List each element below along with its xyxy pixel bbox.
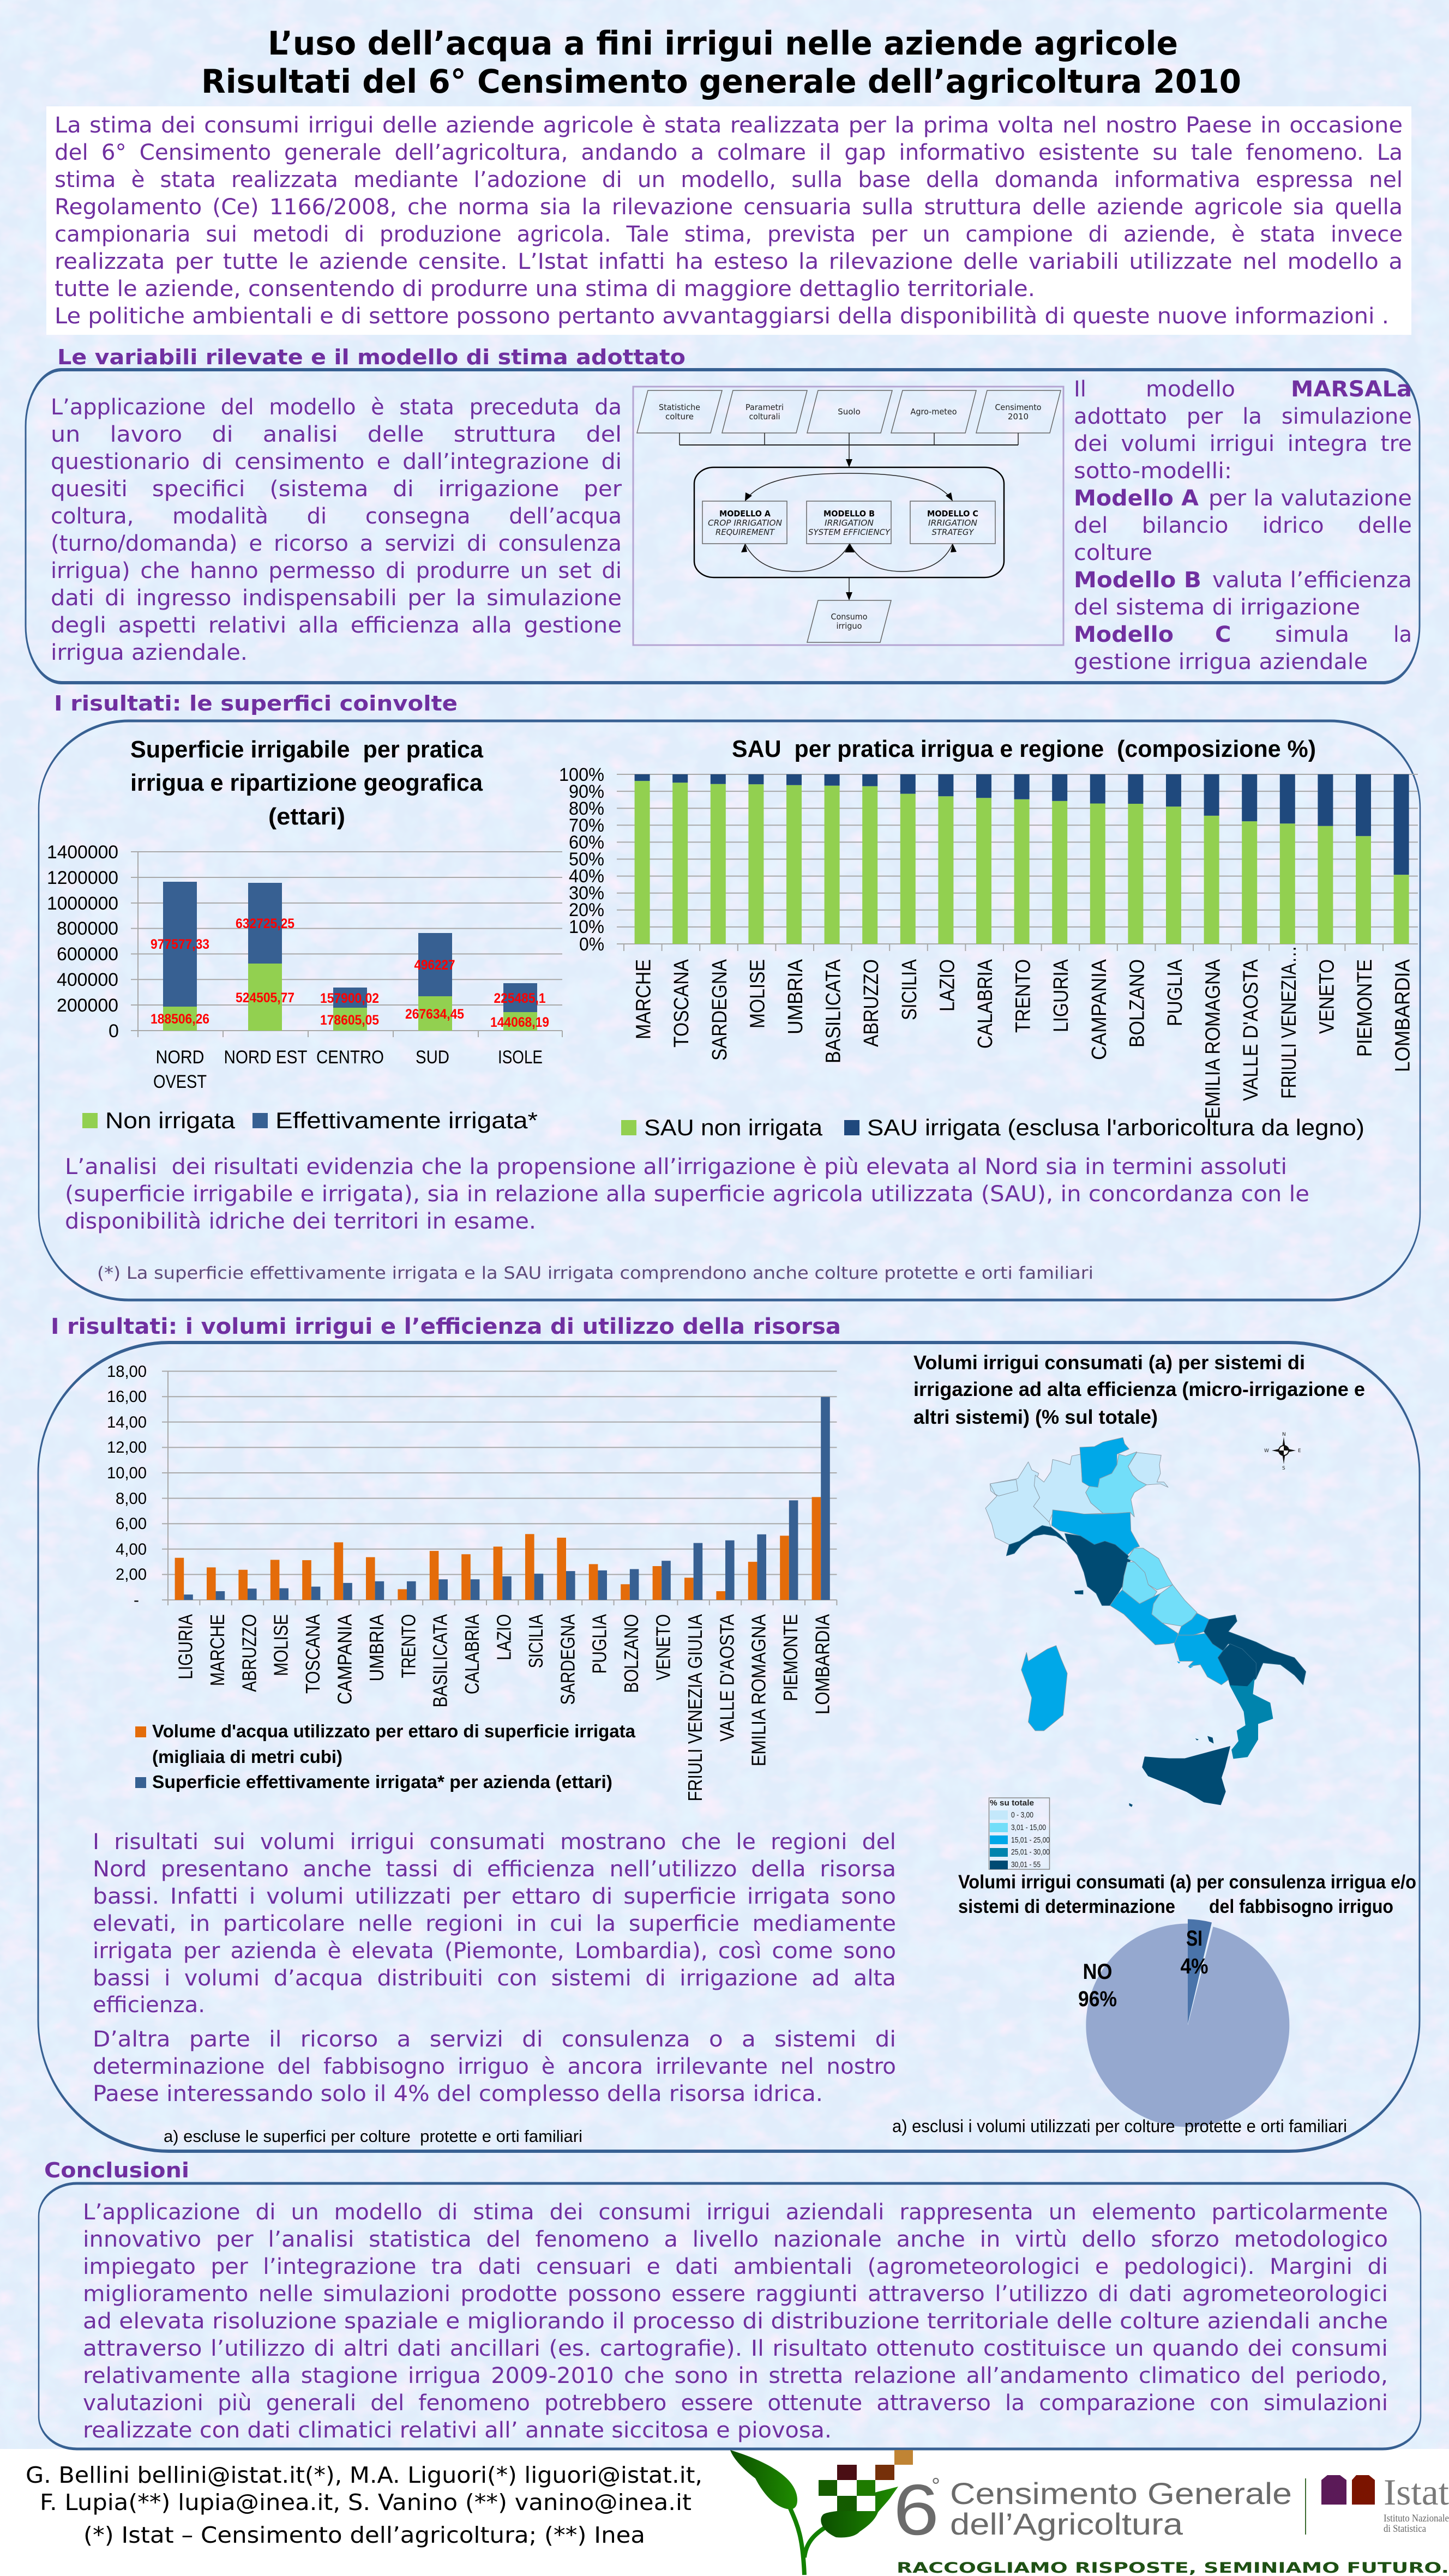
diagram labels: colturali — [749, 412, 780, 422]
chart: SAU per regione — [559, 736, 1418, 1140]
panel: introduction: realizzata per tutte le aziende censite. L’Istat infatti ha esteso la rilevazione delle variabili utilizzate nel modello a — [55, 249, 1403, 274]
y axis labels: 1000000 — [47, 893, 118, 914]
map legend: % su totale — [990, 1798, 1034, 1808]
panel: introduction: La stima dei consumi irrigui delle aziende agricole è stata realizzata per la prima volta nel nostro Paese in occasione — [55, 113, 1403, 138]
category labels: TRENTO — [1012, 959, 1035, 1033]
text: applicazione del modello: un lavoro di analisi delle struttura del — [51, 422, 622, 447]
diagram labels: STRATEGY — [931, 527, 975, 537]
data labels: 977577,33 — [151, 937, 209, 952]
y axis labels: 4,00 — [116, 1540, 147, 1558]
category labels: BASILICATA — [429, 1614, 452, 1707]
text: applicazione del modello: questionario di censimento e dall’integrazione di — [51, 449, 622, 474]
legend — [621, 1115, 1364, 1140]
chart title — [130, 736, 484, 830]
category labels: VENETO — [652, 1614, 674, 1681]
diagram labels: MODELLO B — [823, 509, 875, 519]
pie title — [958, 1871, 1416, 1917]
category labels: LAZIO — [936, 959, 959, 1012]
y axis labels: 10% — [569, 917, 604, 937]
text: sotto-modelli: sotto-modelli: — [1074, 459, 1232, 484]
category labels: VALLE D'AOSTA — [716, 1614, 738, 1742]
category labels: BOLZANO — [1126, 959, 1149, 1048]
y axis labels: 600000 — [57, 944, 118, 965]
y axis labels: 18,00 — [107, 1363, 147, 1381]
models container — [694, 467, 1004, 577]
data labels: 496227 — [414, 958, 455, 973]
legend: Superficie effettivamente irrigata* per azienda (ettari) — [152, 1772, 612, 1792]
text: sotto-modelli: colture — [1074, 540, 1152, 565]
panel: introduction: tutte le aziende, consentendo di produrre una stima di maggiore dettaglio territoriale. — [55, 276, 1035, 302]
panel: introduction: stima è stata realizzata mediante l’adozione di un modello, sulla base della domanda informativa espressa nel — [55, 167, 1403, 192]
category labels: PUGLIA — [588, 1614, 611, 1674]
bars: effettivamente irrigata — [163, 882, 537, 1012]
text: sotto-modelli: Modello B — [1074, 568, 1201, 593]
chart title: (ettari) — [268, 803, 345, 830]
legend — [82, 1108, 538, 1133]
connectors — [680, 433, 1018, 593]
map legend: 15,01 - 25,00 — [1011, 1835, 1050, 1845]
pie title: sistemi di determinazione — [958, 1896, 1175, 1917]
map title: irrigazione ad alta efficienza (micro-irrigazione e — [913, 1378, 1365, 1400]
category labels: ABRUZZO — [238, 1614, 260, 1692]
y axis labels: 2,00 — [116, 1566, 147, 1584]
data labels: 188506,26 — [151, 1012, 209, 1027]
logo text: ° — [931, 2474, 940, 2498]
category labels: FRIULI VENEZIA… — [1278, 946, 1301, 1099]
category labels — [175, 1614, 833, 1801]
arrowheads — [741, 459, 957, 600]
panel: introduction — [46, 106, 1411, 335]
text: applicazione del modello: (turno/domanda) e ricorso a servizi di consulenza — [51, 531, 622, 556]
y axis labels: 8,00 — [116, 1490, 147, 1508]
category labels: CALABRIA — [461, 1614, 483, 1694]
y axis labels: 30% — [569, 883, 604, 904]
chart title: SAU per pratica irrigua e regione (composizione %) — [732, 736, 1316, 762]
legend: SAU irrigata (esclusa l'arboricoltura da legno) — [867, 1115, 1364, 1140]
logo: censimento agricoltura — [730, 2450, 1449, 2576]
category labels — [633, 946, 1415, 1119]
y axis labels: 800000 — [57, 918, 118, 939]
diagram labels: CROP IRRIGATION — [708, 518, 782, 528]
category labels: TRENTO — [397, 1614, 419, 1678]
panel: superfici coinvolte — [39, 721, 1420, 1300]
y axis labels: 0% — [579, 934, 604, 955]
y axis labels: 1400000 — [47, 842, 118, 863]
diagram labels: Censimento — [995, 402, 1042, 412]
category labels: UMBRIA — [365, 1614, 388, 1682]
text: analisi — [65, 1154, 1309, 1234]
map title — [913, 1351, 1365, 1428]
text: sotto-modelli: del sistema di irrigazione — [1074, 595, 1360, 620]
category labels: LAZIO — [493, 1614, 515, 1660]
panel: introduction: Regolamento (Ce) 1166/2008, che norma sia la rilevazione censuaria sulla struttura delle aziende agricole sia quella — [55, 195, 1403, 220]
category labels: FRIULI VENEZIA GIULIA — [684, 1614, 706, 1801]
y axis labels: 6,00 — [116, 1515, 147, 1533]
text: conclusioni: impiegato per l’integrazione tra dati censuari e dati ambientali (agrometeorologici e pedologici). Margini di — [83, 2254, 1388, 2279]
text: sotto-modelli: valuta l’efficienza — [1212, 568, 1412, 593]
y axis labels: 80% — [569, 798, 604, 819]
title: Risultati del 6° Censimento generale dell’agricoltura 2010 — [201, 63, 1241, 101]
data labels: 267634,45 — [405, 1007, 464, 1022]
pie title: Volumi irrigui consumati (a) per consulenza irrigua e/o — [958, 1871, 1416, 1893]
text: authors: G. Bellini bellini@istat.it(*), M.A. Liguori(*) liguori@istat.it, — [26, 2462, 702, 2488]
text: sotto-modelli: Modello A — [1074, 486, 1199, 511]
legend: Volume d'acqua utilizzato per ettaro di superficie irrigata — [152, 1721, 636, 1741]
map: Italia — [985, 1437, 1306, 1807]
category labels: NORD EST — [224, 1047, 308, 1068]
category labels: MOLISE — [746, 959, 769, 1028]
y axis labels: 16,00 — [107, 1388, 147, 1406]
data labels: 144068,19 — [490, 1015, 549, 1030]
category labels: ABRUZZO — [860, 959, 883, 1047]
category labels: CAMPANIA — [1088, 959, 1111, 1060]
category labels: CAMPANIA — [334, 1614, 356, 1705]
text: authors: F. Lupia(**) lupia@inea.it, S. Vanino (**) vanino@inea.it — [40, 2489, 692, 2515]
y axis labels: 400000 — [57, 970, 118, 990]
footnote: esclusi i volumi: a) esclusi i volumi utilizzati per colture protette e orti familiari — [892, 2116, 1347, 2136]
category labels: MARCHE — [206, 1614, 229, 1686]
diagram labels: IRRIGATION — [825, 518, 874, 528]
category labels: VALLE D'AOSTA — [1240, 959, 1262, 1101]
legend — [135, 1721, 636, 1792]
chart: superficie irrigabile — [47, 736, 562, 1133]
chart: pie consulenza irrigua — [1078, 1919, 1289, 2127]
y axis labels: 70% — [569, 815, 604, 836]
category labels: ISOLE — [498, 1047, 543, 1068]
text: conclusioni: valutazioni più generali del fenomeno potrebbero essere ottenute attraverso la comparazione con simulazioni — [83, 2391, 1388, 2416]
bars: non irrigata — [163, 964, 537, 1031]
icon: Istat logo: Istat — [1384, 2471, 1449, 2513]
text: risultati sui volumi: irrigata per azienda è elevata (Piemonte, Lombardia), così come sono — [93, 1939, 896, 1964]
text: risultati sui volumi — [93, 1829, 896, 2106]
diagram labels: Statistiche — [659, 402, 700, 412]
text: sotto-modelli: simula — [1275, 622, 1349, 647]
y axis labels: - — [134, 1591, 139, 1609]
legend: Non irrigata — [105, 1108, 236, 1133]
y axis labels: 40% — [569, 866, 604, 887]
text: sotto-modelli: del bilancio idrico delle — [1074, 513, 1412, 538]
data labels: 225485,1 — [494, 991, 546, 1006]
legend: Effettivamente irrigata* — [275, 1108, 538, 1133]
text: conclusioni — [83, 2200, 1388, 2443]
text: applicazione del modello: coltura, modalità di consegna dell’acqua — [51, 504, 622, 529]
category labels: CENTRO — [316, 1047, 384, 1068]
text: sotto-modelli — [1074, 377, 1412, 675]
icon: checker squares — [819, 2450, 913, 2511]
diagram labels: 2010 — [1008, 412, 1029, 422]
category labels: LOMBARDIA — [811, 1614, 833, 1714]
text: conclusioni: L’applicazione di un modello di stima dei consumi irrigui aziendali rappresenta un elemento particolarmente — [83, 2200, 1388, 2225]
data labels: 524505,77 — [236, 990, 294, 1006]
category labels: LIGURIA — [1050, 959, 1073, 1032]
pie title: del fabbisogno irriguo — [1209, 1896, 1393, 1917]
text: conclusioni: ad elevata risoluzione spaziale e migliorando il processo di distribuzione territoriale delle colture aziendali anche — [83, 2309, 1388, 2334]
text: sotto-modelli: MARSALa — [1291, 377, 1412, 402]
diagram labels: SYSTEM EFFICIENCY — [808, 527, 891, 537]
icon: plant — [730, 2450, 898, 2575]
footnote: escluse le superfici: a) escluse le superfici per colture protette e orti familiari — [164, 2127, 582, 2146]
heading: conclusioni: Conclusioni — [44, 2158, 189, 2182]
text: sotto-modelli: modello — [1146, 377, 1235, 402]
bars: SAU non irrigata — [635, 781, 1409, 944]
logo text: dell’Agricoltura — [950, 2507, 1183, 2541]
category labels: BASILICATA — [822, 959, 845, 1063]
icon: compass: S — [1282, 1466, 1285, 1471]
text: risultati sui volumi: efficienza. — [93, 1993, 205, 2018]
chart title: irrigua e ripartizione geografica — [130, 769, 483, 796]
map legend: 30,01 - 55 — [1011, 1860, 1041, 1869]
category labels: BOLZANO — [620, 1614, 642, 1693]
diagram labels: Suolo — [838, 407, 861, 417]
map legend: 25,01 - 30,00 — [1011, 1847, 1050, 1857]
text: applicazione del modello: quesiti specifici (sistema di irrigazione per — [51, 477, 622, 502]
category labels: LIGURIA — [175, 1614, 196, 1680]
diagram labels: IRRIGATION — [928, 518, 977, 528]
text: conclusioni: attraverso l’utilizzo di altri dati ancillari (es. cartografie). Il risultato ottenuto costituisce un quando dei consumi — [83, 2336, 1388, 2361]
map title: Volumi irrigui consumati (a) per sistemi di — [913, 1351, 1305, 1374]
chart: volumi e superficie per regione — [107, 1363, 837, 1801]
text: sotto-modelli: adottato per la simulazione — [1074, 404, 1412, 429]
chart: pie consulenza irrigua: NO — [1083, 1960, 1113, 1984]
map legend: 0 - 3,00 — [1011, 1810, 1033, 1820]
panel: conclusioni — [39, 2183, 1421, 2449]
category labels: EMILIA ROMAGNA — [1202, 959, 1225, 1119]
heading: volumi: I risultati: i volumi irrigui e l’efficienza di utilizzo della risorsa — [51, 1314, 841, 1339]
text: analisi: L’analisi dei risultati evidenzia che la propensione all’irrigazione è più elevata al Nord sia in termini assoluti — [65, 1154, 1287, 1179]
category labels: TOSCANA — [670, 959, 693, 1048]
text: risultati sui volumi: elevati, in particolare nelle regioni in cui la superficie mediamente — [93, 1911, 896, 1936]
diagram labels: colture — [665, 412, 694, 422]
diagram labels: MODELLO A — [719, 509, 771, 519]
text: conclusioni: innovativo per l’analisi statistica del fenomeno a livello nazionale anche in virtù dello sforzo metodologico — [83, 2227, 1388, 2252]
text: sotto-modelli: per la valutazione — [1208, 486, 1412, 511]
map legend — [989, 1798, 1050, 1869]
category labels — [153, 1047, 543, 1092]
text: risultati sui volumi: bassi. Infatti i volumi utilizzati per ettaro di superficie irrigata sono — [93, 1884, 896, 1909]
category labels: PIEMONTE — [1354, 959, 1376, 1057]
map legend: 3,01 - 15,00 — [1011, 1823, 1046, 1832]
text: risultati sui volumi: bassi i volumi d’acqua distribuiti con sistemi di irrigazione ad alta — [93, 1966, 896, 1991]
bars: volume d'acqua — [175, 1497, 821, 1600]
diagram labels: REQUIREMENT — [716, 527, 775, 537]
text: applicazione del modello: L’applicazione del modello è stata preceduta da — [51, 395, 622, 420]
diagram labels: irriguo — [837, 621, 862, 631]
category labels: MARCHE — [633, 959, 656, 1039]
map title: altri sistemi) (% sul totale) — [913, 1406, 1158, 1428]
category labels: EMILIA ROMAGNA — [748, 1614, 770, 1766]
input parallelograms — [637, 390, 1061, 642]
diagram labels: Agro-meteo — [911, 407, 957, 417]
category labels: LOMBARDIA — [1392, 959, 1415, 1072]
category labels: VENETO — [1315, 959, 1338, 1034]
icon: compass: N — [1282, 1432, 1286, 1437]
y axis labels: 20% — [569, 900, 604, 920]
category labels: SICILIA — [525, 1614, 547, 1668]
y axis labels: 60% — [569, 832, 604, 853]
category labels: CALABRIA — [974, 959, 997, 1049]
logo text: Censimento Generale — [950, 2476, 1292, 2511]
panel: introduction: Le politiche ambientali e di settore possono pertanto avvantaggiarsi della disponibilità di queste nuove informazioni . — [55, 304, 1389, 329]
diagram labels — [659, 402, 1042, 631]
panel: volumi irrigui — [38, 1343, 1420, 2151]
category labels: MOLISE — [270, 1614, 292, 1676]
panel: introduction: campionaria sui metodi di produzione agricola. Tale stima, prevista per un campione di aziende, è stata invece — [55, 222, 1403, 247]
category labels: SARDEGNA — [708, 959, 731, 1061]
text: risultati sui volumi: D’altra parte il ricorso a servizi di consulenza o a sistemi di — [93, 2027, 896, 2052]
chart: pie consulenza irrigua: 4% — [1180, 1954, 1208, 1978]
y axis labels: 90% — [569, 781, 604, 802]
text: applicazione del modello — [51, 395, 622, 665]
y axis labels: 200000 — [57, 995, 118, 1016]
panel: introduction: del 6° Censimento generale dell’agricoltura, andando a colmare il gap informativo esistente su tale fenomeno. La — [55, 140, 1403, 165]
y axis labels: 0 — [109, 1021, 119, 1042]
icon: compass: E — [1298, 1448, 1301, 1454]
y axis labels: 50% — [569, 849, 604, 870]
text: sotto-modelli: C — [1215, 622, 1231, 647]
category labels: PIEMONTE — [779, 1614, 802, 1701]
title: L’uso dell’acqua a fini irrigui nelle aziende agricole — [268, 25, 1178, 63]
heading: variabili: Le variabili rilevate e il modello di stima adottato — [57, 345, 686, 369]
diagram labels: MODELLO C — [927, 509, 978, 519]
text: risultati sui volumi: Nord presentano anche tassi di efficienza nell’utilizzo della risorsa — [93, 1857, 896, 1882]
text: analisi: disponibilità idriche dei territori in esame. — [65, 1209, 536, 1234]
title — [201, 25, 1241, 101]
text: sotto-modelli: Il — [1074, 377, 1086, 402]
icon: Istat logo — [1321, 2471, 1449, 2535]
chart: pie consulenza irrigua: SI — [1186, 1927, 1203, 1951]
text: sotto-modelli: gestione irrigua aziendale — [1074, 649, 1368, 675]
category labels: SUD — [416, 1047, 449, 1068]
panel: modello di stima — [26, 370, 1420, 683]
category labels: SARDEGNA — [556, 1614, 579, 1705]
y axis labels: 14,00 — [107, 1413, 147, 1431]
text: conclusioni: relativamente alla stagione irrigua 2009-2010 che sono in stretta relazione all’andamento climatico del periodo, — [83, 2363, 1388, 2388]
y axis labels — [47, 842, 119, 1042]
text: applicazione del modello: irrigua aziendale. — [51, 640, 248, 665]
category labels: TOSCANA — [302, 1614, 324, 1694]
category labels: NORD — [156, 1047, 204, 1068]
y axis labels: 10,00 — [107, 1464, 147, 1482]
diagram labels: Parametri — [745, 402, 784, 412]
data labels: 157900,02 — [320, 991, 379, 1006]
text: applicazione del modello: dati di ingresso indispensabili per la simulazione — [51, 586, 622, 611]
legend: (migliaia di metri cubi) — [152, 1747, 342, 1767]
category labels: SICILIA — [898, 959, 921, 1020]
text: conclusioni: miglioramento nelle simulazioni prodotte possono essere raggiunti attraverso l’utilizzo di dati agrometeorologici — [83, 2282, 1388, 2307]
text: risultati sui volumi: determinazione del fabbisogno irriguo è ancora irrilevante nel nostro — [93, 2054, 896, 2079]
text: conclusioni: realizzate con dati climatici relativi all’ annate siccitosa e piovosa. — [83, 2418, 832, 2443]
logo text: 6 — [893, 2470, 939, 2550]
text: applicazione del modello: irrigua) che hanno permesso di produrre un set di — [51, 558, 622, 583]
diagram: modello MARSALa — [633, 387, 1063, 645]
text: risultati sui volumi: I risultati sui volumi irrigui consumati mostrano che le regioni del — [93, 1829, 896, 1855]
chart: pie consulenza irrigua: 96% — [1078, 1987, 1117, 2011]
category labels: PUGLIA — [1164, 959, 1187, 1026]
text: analisi: (superficie irrigabile e irrigata), sia in relazione alla superficie agricola utilizzata (SAU), in concordanza con le — [65, 1182, 1309, 1207]
bars: SAU irrigata — [635, 774, 1409, 875]
text: sotto-modelli: la — [1393, 622, 1412, 647]
y axis labels: 1200000 — [47, 868, 118, 888]
text: authors: (*) Istat – Censimento dell’agricoltura; (**) Inea — [83, 2522, 645, 2548]
text: sotto-modelli: dei volumi irrigui integra tre — [1074, 431, 1412, 456]
icon: Istat logo: di Statistica — [1384, 2523, 1426, 2535]
data labels: 632725,25 — [236, 916, 294, 931]
text: sotto-modelli: Modello — [1074, 622, 1174, 647]
icon: compass — [1264, 1432, 1301, 1471]
text: authors — [26, 2462, 702, 2548]
y axis labels: 100% — [559, 765, 604, 785]
category labels: OVEST — [153, 1072, 207, 1092]
text: risultati sui volumi: Paese interessando solo il 4% del complesso della risorsa idrica. — [93, 2081, 823, 2106]
y axis labels — [107, 1363, 147, 1609]
data labels: 178605,05 — [320, 1013, 379, 1028]
diagram labels: Consumo — [831, 612, 867, 622]
heading: superfici: I risultati: le superfici coinvolte — [54, 691, 458, 715]
text: applicazione del modello: degli aspetti relativi alla efficienza alla gestione — [51, 613, 622, 638]
legend: SAU non irrigata — [644, 1115, 823, 1140]
data labels — [151, 916, 549, 1030]
bars: superficie per azienda — [184, 1397, 830, 1600]
y axis labels — [559, 765, 604, 955]
category labels: UMBRIA — [784, 959, 807, 1034]
model boxes — [702, 501, 995, 544]
icon: compass: W — [1264, 1448, 1269, 1454]
footnote: (*) La superficie effettivamente irrigata e la SAU irrigata comprendono anche colture protette e orti familiari — [97, 1263, 1093, 1283]
y axis labels: 12,00 — [107, 1439, 147, 1456]
logo text — [893, 2470, 1292, 2550]
chart title: Superficie irrigabile per pratica — [130, 736, 484, 763]
